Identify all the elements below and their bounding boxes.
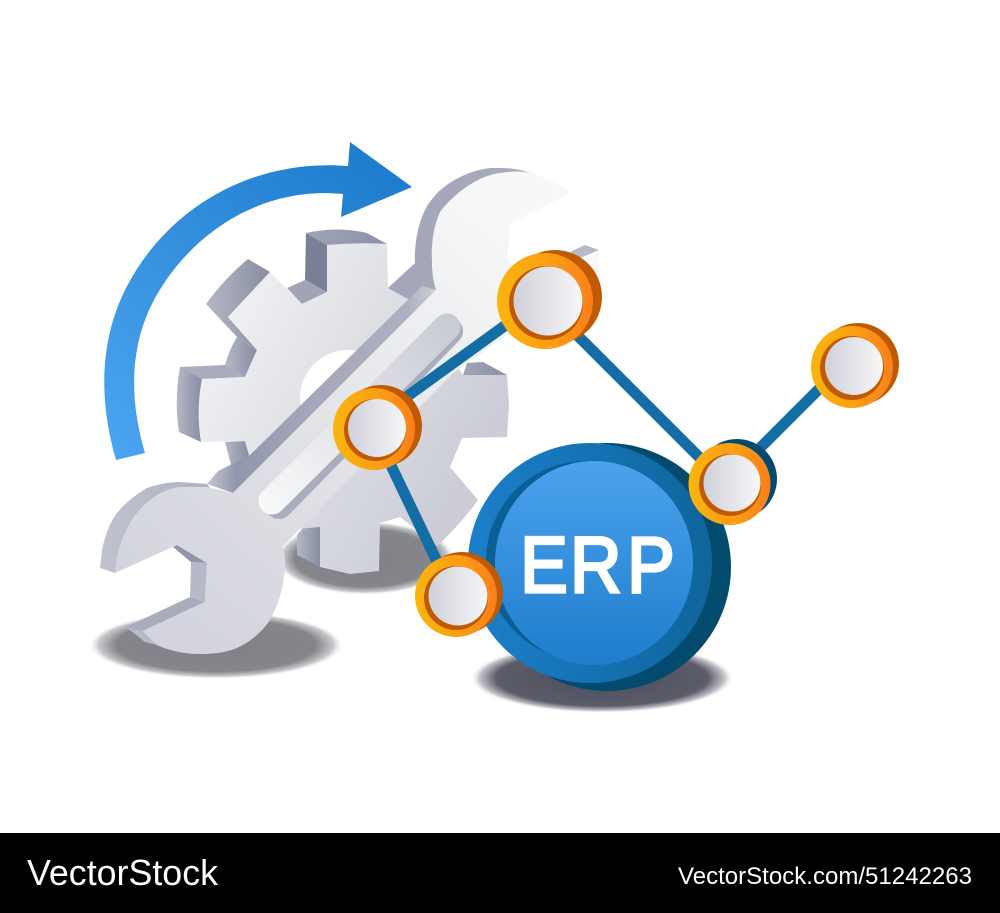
sphere inner crescent (486, 461, 686, 661)
node: upper left (333, 385, 422, 470)
footer brand: VectorStock (27, 852, 219, 893)
shadow: ERP sphere (470, 643, 734, 713)
icon: gear (177, 230, 509, 574)
wrench handle slot (272, 327, 449, 505)
node: right middle (688, 439, 777, 525)
node: lower left (415, 552, 503, 637)
shadow: gear (275, 521, 455, 595)
gear front face (199, 243, 509, 574)
wrench upper head extrusion (388, 168, 530, 306)
wrench lower head extrusion (100, 482, 215, 573)
connector lines (386, 322, 825, 572)
node: top (497, 250, 602, 349)
sphere back (483, 443, 731, 691)
footer image id: VectorStock.com/51242263 (678, 863, 972, 890)
sphere disc (495, 461, 693, 665)
gear extrusion sides (177, 230, 507, 567)
shadow: wrench (88, 611, 344, 679)
icon: wrench (100, 172, 600, 654)
ERP sphere (468, 443, 731, 691)
node: far right (811, 323, 899, 408)
icon: curved blue arrow (104, 142, 412, 460)
wrench front face (115, 172, 600, 654)
footer bar (0, 833, 1000, 913)
wrench jaw notch edges (126, 245, 599, 645)
label: ERP: ERP (520, 521, 675, 609)
wrench handle groove band (207, 286, 436, 493)
gear centre hole (300, 350, 396, 446)
sphere ring (468, 443, 712, 683)
